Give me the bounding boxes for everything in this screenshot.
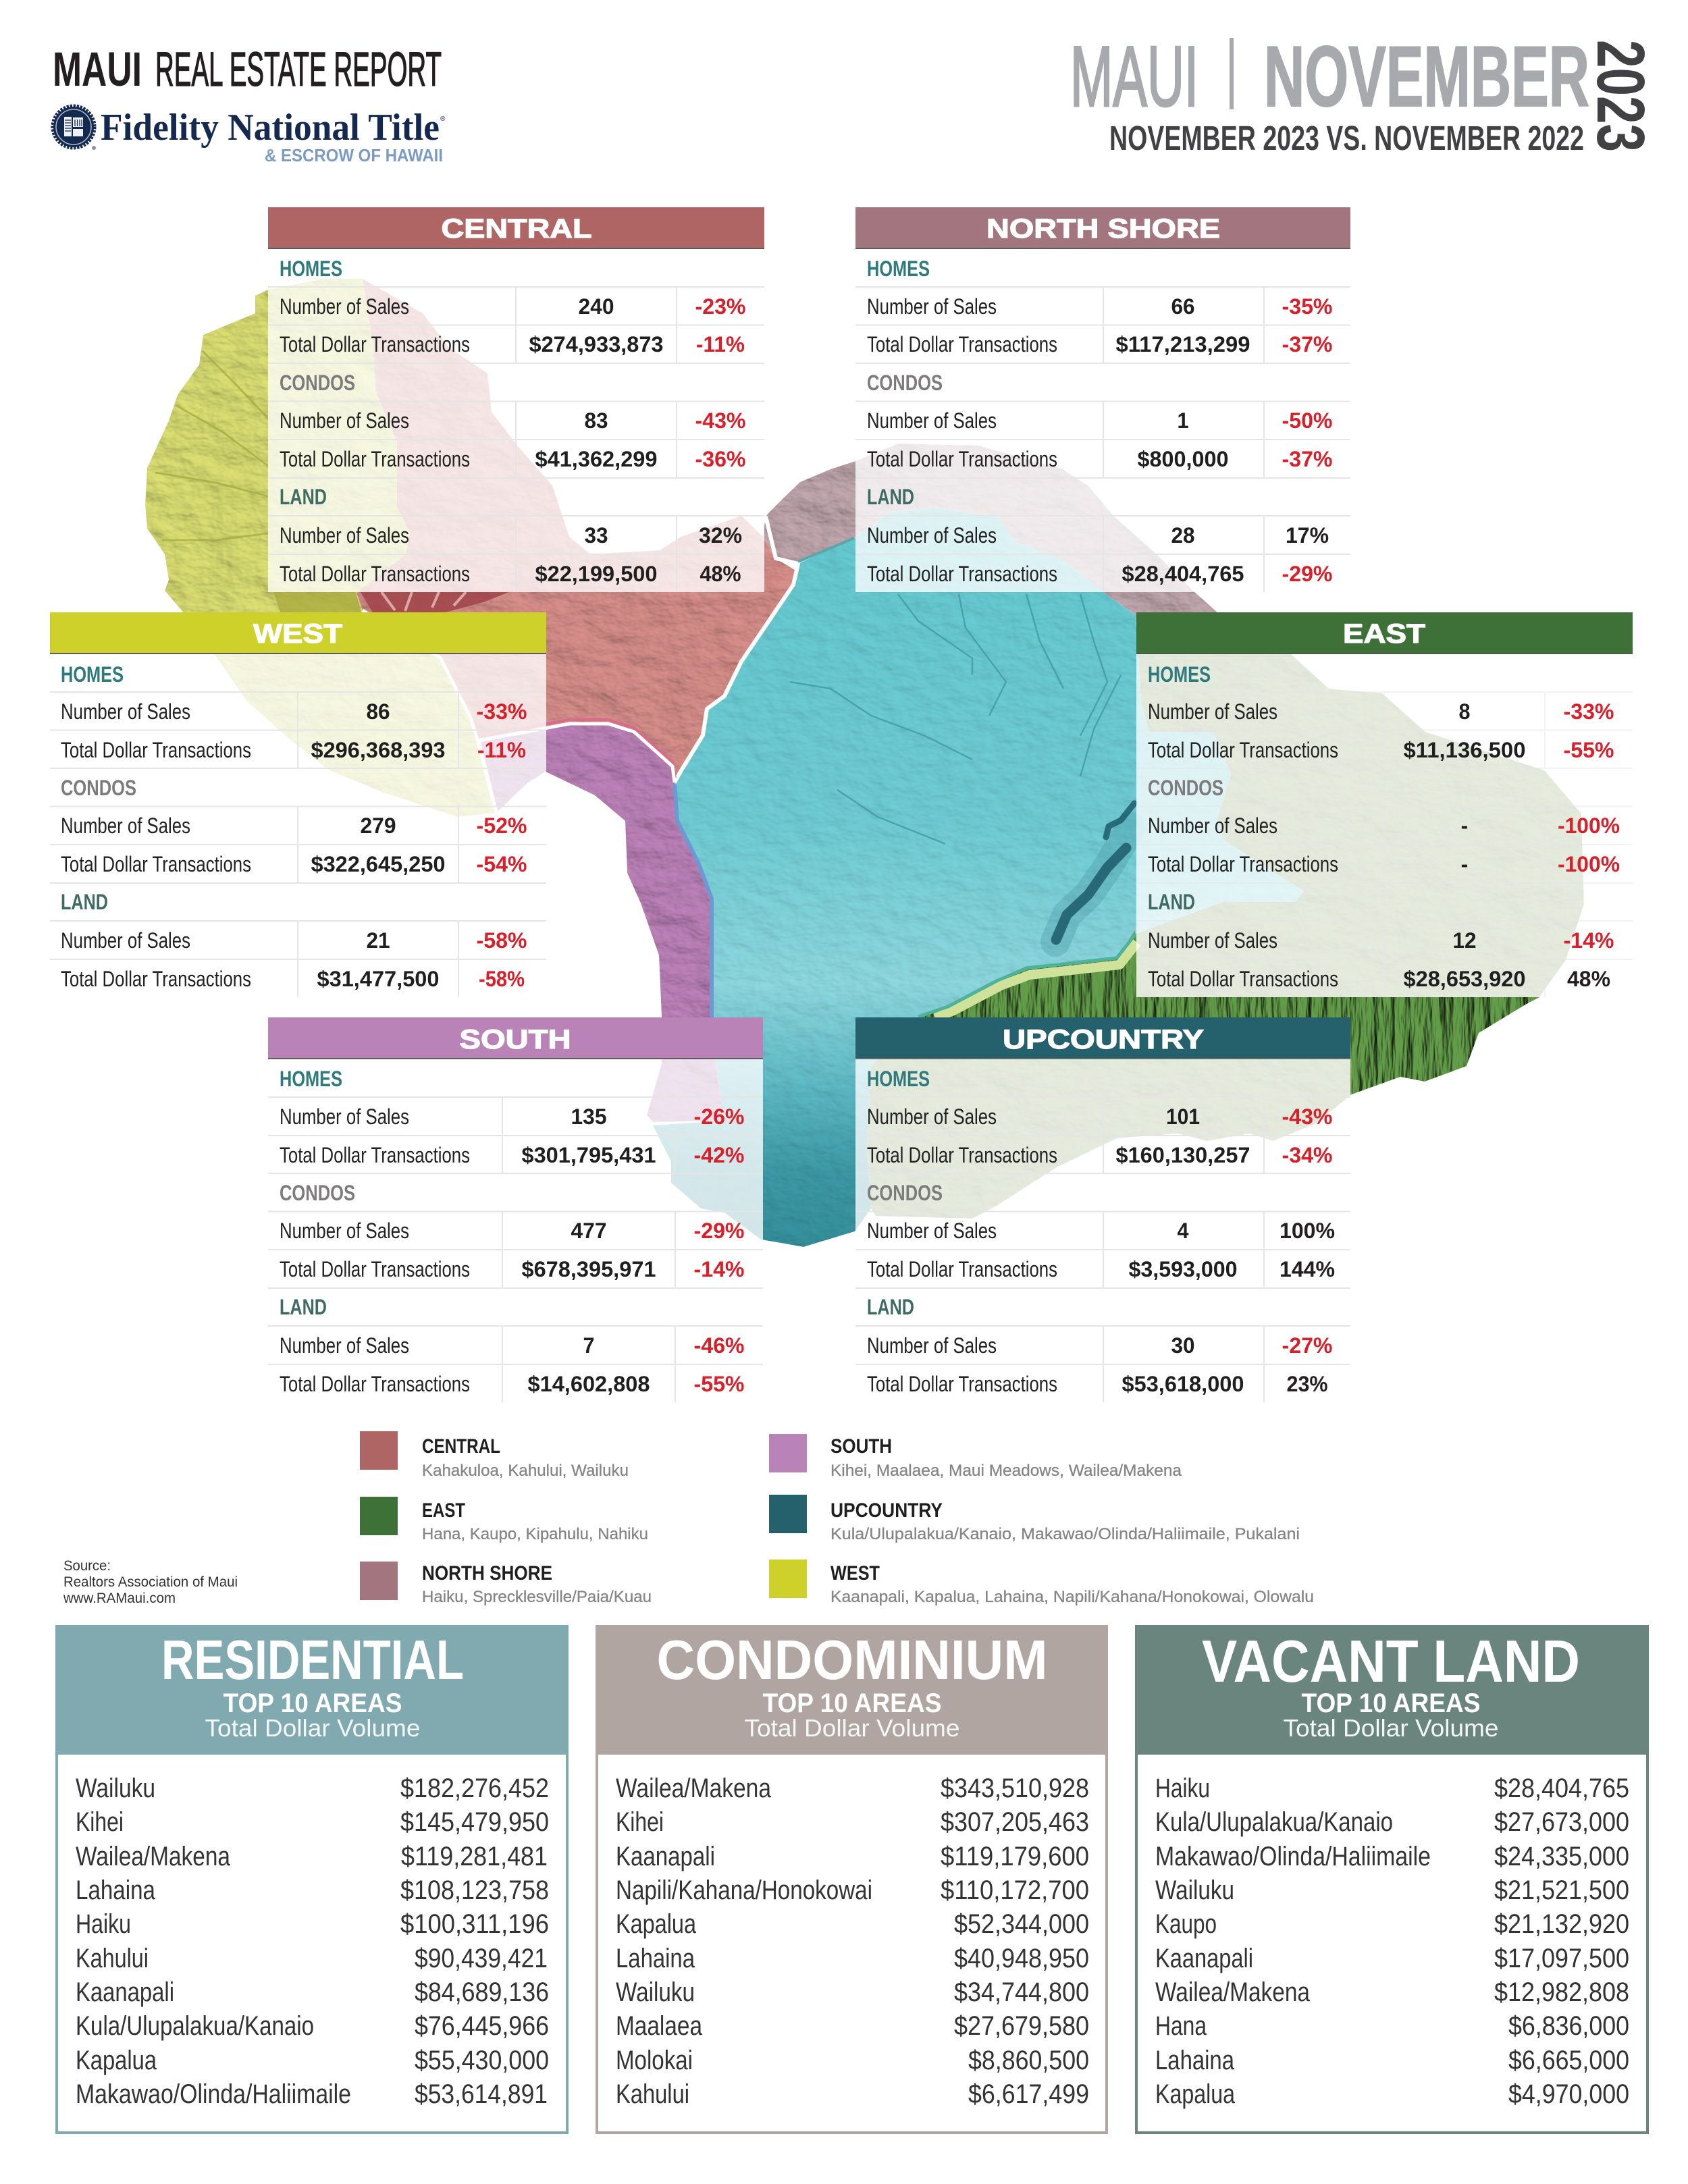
legend item: west [769,1560,1314,1606]
list: residential areas: $55,430,000 [415,2046,549,2075]
list: condominium areas: $6,617,499 [968,2079,1089,2109]
map detail: upcountry gullies [790,594,1121,844]
legend item: upcountry [769,1495,1300,1543]
condos rows: -43% [695,408,745,433]
land rows: -27% [1282,1333,1333,1358]
land rows: $28,653,920 [1403,967,1526,991]
list: vacant land areas: $28,404,765 [1494,1774,1629,1803]
land rows: -29% [1282,562,1333,586]
list: vacant land areas: $21,132,920 [1494,1909,1629,1939]
homes rows: -42% [694,1143,744,1167]
list: vacant land areas: Kula/Ulupalakua/Kanaio [1155,1807,1393,1837]
condos rows: 477 [571,1219,606,1243]
condos rows: Total Dollar Transactions [61,852,251,876]
list: vacant land areas: $4,970,000 [1508,2079,1629,2109]
box header: condominium: Total Dollar Volume [744,1714,960,1742]
box header: residential: TOP 10 AREAS [223,1688,402,1718]
list: residential areas: $182,276,452 [400,1774,549,1803]
condos rows: 83 [585,408,608,433]
map detail: west ridges [155,351,268,540]
land rows: Total Dollar Transactions [1148,967,1338,991]
homes rows: -11% [477,738,526,762]
heading: Maui November 2023: MAUI [1070,28,1198,124]
list: vacant land areas: $24,335,000 [1494,1842,1629,1871]
homes rows: HOMES [280,1067,342,1091]
condos rows: CONDOS [280,371,355,395]
land rows: LAND [61,890,108,914]
list: vacant land areas: Wailuku [1155,1875,1234,1905]
homes rows: 101 [1166,1104,1200,1129]
list: condominium areas: Kahului [616,2079,689,2109]
land rows: LAND [867,485,914,509]
condos rows: Total Dollar Transactions [867,1257,1057,1281]
box header: residential: Total Dollar Volume [205,1714,420,1742]
land rows: Number of Sales [280,523,409,548]
panel header: upcountry: UPCOUNTRY [1003,1025,1204,1055]
list: condominium areas: $40,948,950 [954,1944,1089,1973]
source note [63,1558,238,1606]
land rows: 7 [583,1333,594,1358]
condos rows: -14% [694,1257,744,1281]
box header: vacant land: Total Dollar Volume [1283,1714,1499,1742]
list: vacant land areas: Wailea/Makena [1155,1977,1311,2007]
homes rows: Total Dollar Transactions [1148,738,1338,762]
condos rows [61,776,527,876]
land rows: LAND [867,1295,914,1319]
condos rows [280,371,745,471]
homes rows: HOMES [867,257,930,281]
condos rows: CONDOS [1148,776,1223,800]
box header: residential: RESIDENTIAL [161,1628,464,1691]
list: residential areas: $90,439,421 [415,1944,548,1973]
legend item: east: Hana, Kaupo, Kipahulu, Nahiku [422,1525,648,1543]
list: vacant land areas: Hana [1155,2011,1207,2041]
condos rows: - [1461,814,1468,838]
list: vacant land areas: $6,665,000 [1508,2046,1629,2075]
list: condominium areas: $307,205,463 [941,1807,1089,1837]
homes rows: Total Dollar Transactions [867,1143,1057,1167]
homes rows: -34% [1282,1143,1333,1167]
condos rows: $41,362,299 [535,447,658,471]
homes rows: Number of Sales [280,1104,409,1129]
report title [53,43,442,97]
panel: vacant land top 10 [1135,1625,1649,2133]
legend item: central [360,1431,629,1480]
homes rows: -33% [477,699,527,724]
homes rows: Number of Sales [867,1104,997,1129]
land rows: LAND [280,1295,327,1319]
condos rows: $3,593,000 [1129,1257,1237,1281]
panel header: west: WEST [253,619,342,649]
logo: Fidelity National Title: Fidelity National Title [101,107,440,149]
legend item: south: Kihei, Maalaea, Maui Meadows, Wailea/Makena [830,1462,1182,1480]
list: condominium areas: Maalaea [616,2011,703,2041]
land rows: -58% [477,928,527,953]
condos rows: -100% [1558,852,1620,876]
box header: vacant land [1135,1625,1649,1755]
panel header: east: EAST [1343,619,1425,649]
list: residential areas [76,1774,549,2109]
land rows: Number of Sales [867,1333,997,1358]
heading: Maui November 2023 [1070,28,1658,157]
homes rows: 8 [1458,699,1471,724]
homes rows: Number of Sales [280,294,409,319]
legend item: north shore [360,1562,652,1606]
condos rows [867,371,1333,471]
panel header: central: CENTRAL [442,214,591,244]
map detail: upcountry ravine [1055,803,1134,942]
legend item: central: Kahakuloa, Kahului, Wailuku [422,1462,629,1480]
homes rows: Total Dollar Transactions [61,738,251,762]
legend item: south: SOUTH [830,1435,892,1458]
source note: Realtors Association of Maui [63,1574,238,1590]
list: vacant land areas: $21,521,500 [1494,1875,1629,1905]
land rows: 48% [700,562,741,586]
homes rows: -23% [695,294,745,319]
panel header: west [50,612,546,654]
list: condominium areas: $110,172,700 [941,1875,1089,1905]
list: residential areas: $145,479,950 [400,1807,549,1837]
land rows: LAND [1148,890,1195,914]
logo: Fidelity National Title [53,105,446,165]
land rows: LAND [280,485,327,509]
land rows: Total Dollar Transactions [61,967,251,991]
homes rows [280,1067,744,1167]
homes rows: $301,795,431 [521,1143,656,1167]
homes rows: $160,130,257 [1115,1143,1250,1167]
condos rows: CONDOS [867,371,943,395]
list: vacant land areas: $27,673,000 [1494,1807,1629,1837]
list: vacant land areas: Kaanapali [1155,1944,1253,1973]
condos rows: Total Dollar Transactions [280,447,470,471]
land rows: 30 [1171,1333,1195,1358]
land rows: Number of Sales [61,928,190,953]
condos rows: -52% [477,814,527,838]
land rows [867,485,1333,586]
land rows: 48% [1567,967,1610,991]
legend item: central: CENTRAL [422,1435,500,1458]
panel: upcountry [855,1017,1350,1402]
homes rows: -55% [1564,738,1614,762]
land rows [280,1295,744,1396]
condos rows: 279 [361,814,396,838]
land rows: $14,602,808 [528,1372,650,1396]
list: condominium areas: Kihei [616,1807,664,1837]
list: residential areas: Kaanapali [76,1977,174,2007]
condos rows: Total Dollar Transactions [1148,852,1338,876]
land rows [867,1295,1333,1396]
condos rows: $800,000 [1137,447,1229,471]
condos rows: Number of Sales [867,1219,997,1243]
report title: REAL ESTATE REPORT [155,43,442,97]
map region: central [357,279,797,782]
list: condominium areas: $343,510,928 [941,1774,1089,1803]
list: vacant land areas: Kaupo [1155,1909,1217,1939]
homes rows: $117,213,299 [1115,332,1250,356]
list: condominium areas: Kapalua [616,1909,697,1939]
condos rows: - [1461,852,1468,876]
list: residential areas: Haiku [76,1909,131,1939]
homes rows: $296,368,393 [311,738,446,762]
source note: www.RAMaui.com [63,1591,176,1606]
list: condominium areas: Molokai [616,2046,693,2075]
source note: Source: [63,1558,111,1574]
panel: east [1136,612,1633,997]
list: residential areas: Makawao/Olinda/Haliimaile [76,2079,351,2109]
homes rows: -37% [1282,332,1333,356]
condos rows [280,1181,744,1281]
logo: Fidelity National Title: ® [440,115,446,123]
condos rows: -29% [694,1219,744,1243]
map region: east [867,613,1584,1219]
condos rows: Total Dollar Transactions [280,1257,470,1281]
panel header: east [1136,612,1633,654]
land rows: Number of Sales [1148,928,1277,953]
list: residential areas: Kula/Ulupalakua/Kanaio [76,2011,314,2041]
list: vacant land areas: Makawao/Olinda/Haliimaile [1155,1842,1431,1871]
list: vacant land areas: Lahaina [1155,2046,1235,2075]
land rows: Total Dollar Transactions [280,562,470,586]
map region: upcountry [653,508,1304,1247]
land rows: -55% [694,1372,744,1396]
land rows [61,890,527,991]
legend item: upcountry: Kula/Ulupalakua/Kanaio, Makawao/Olinda/Haliimaile, Pukalani [830,1525,1300,1543]
homes rows: Total Dollar Transactions [280,332,470,356]
homes rows: HOMES [280,257,342,281]
condos rows: Number of Sales [867,408,997,433]
map of Maui regions [145,279,1584,1247]
condos rows [1148,776,1620,876]
list: condominium areas: Lahaina [616,1944,695,1973]
condos rows: Number of Sales [1148,814,1277,838]
condos rows: -50% [1282,408,1333,433]
condos rows: -37% [1282,447,1333,471]
list: vacant land areas: Haiku [1155,1774,1210,1803]
homes rows: Total Dollar Transactions [867,332,1057,356]
list: residential areas: Wailea/Makena [76,1842,231,1871]
land rows: 23% [1287,1372,1327,1396]
land rows: 21 [366,928,390,953]
homes rows: Number of Sales [1148,699,1277,724]
homes rows: -35% [1282,294,1333,319]
legend item: south [769,1434,1182,1480]
map region: west [145,279,496,817]
list: residential areas: $53,614,891 [415,2079,548,2109]
land rows [280,485,742,586]
legend item: north shore: Haiku, Sprecklesville/Paia/Kuau [422,1588,652,1606]
condos rows: -100% [1558,814,1620,838]
panel: west [50,612,546,997]
list: residential areas: Wailuku [76,1774,155,1803]
homes rows: 66 [1171,294,1195,319]
homes rows: Number of Sales [61,699,190,724]
homes rows [61,662,527,762]
homes rows: -11% [696,332,745,356]
legend item: west: Kaanapali, Kapalua, Lahaina, Napili/Kahana/Honokowai, Olowalu [830,1588,1314,1606]
map detail: mountain ridges [273,592,509,612]
land rows: $28,404,765 [1122,562,1244,586]
list: vacant land areas: $17,097,500 [1494,1944,1629,1973]
logo: Fidelity National Title: & ESCROW OF HAWAII [265,145,443,165]
condos rows: Number of Sales [61,814,190,838]
list: condominium areas: Kaanapali [616,1842,715,1871]
list: residential areas: Kahului [76,1944,149,1973]
land rows: 12 [1453,928,1476,953]
land rows: Number of Sales [280,1333,409,1358]
list: residential areas: $100,311,196 [400,1909,549,1939]
land rows: $22,199,500 [535,562,658,586]
box header: condominium [596,1625,1108,1755]
legend item: north shore: NORTH SHORE [422,1562,552,1584]
map detail: east rainforest [918,934,1539,1094]
list: vacant land areas: $12,982,808 [1494,1977,1629,2007]
homes rows: $11,136,500 [1403,738,1526,762]
panel header: central [268,207,764,249]
list: condominium areas: Napili/Kahana/Honokowai [616,1875,872,1905]
panel header: north shore [855,207,1350,249]
condos rows: CONDOS [280,1181,355,1205]
box header: vacant land: VACANT LAND [1202,1628,1580,1695]
homes rows: HOMES [1148,662,1211,687]
list: residential areas: $119,281,481 [401,1842,548,1871]
homes rows: -43% [1282,1104,1333,1129]
box header: residential [55,1625,569,1755]
land rows: -14% [1564,928,1614,953]
condos rows: $322,645,250 [311,852,446,876]
homes rows [1148,662,1614,762]
list: condominium areas [616,1774,1089,2109]
list: residential areas: $108,123,758 [400,1875,549,1905]
panel header: north shore: NORTH SHORE [986,214,1220,244]
legend item: upcountry: UPCOUNTRY [830,1499,943,1522]
list: residential areas: Kapalua [76,2046,157,2075]
list: condominium areas: $8,860,500 [968,2046,1089,2075]
map region: north shore [763,444,1218,615]
homes rows [867,257,1333,356]
list: vacant land areas: $6,836,000 [1508,2011,1629,2041]
condos rows: 1 [1178,408,1188,433]
condos rows: -54% [477,852,527,876]
land rows: 17% [1286,523,1329,548]
legend item: west: WEST [830,1562,880,1584]
heading: Maui November 2023: 2023 [1583,40,1658,152]
legend item: east: EAST [422,1499,465,1522]
panel: central [268,207,764,592]
list: condominium areas: $119,179,600 [941,1842,1089,1871]
homes rows: HOMES [61,662,124,687]
report title: MAUI [53,43,142,97]
land rows: -46% [694,1333,744,1358]
map region: south [479,722,722,1122]
homes rows: 86 [366,699,390,724]
condos rows: CONDOS [61,776,136,800]
list: condominium areas: $52,344,000 [954,1909,1089,1939]
legend [360,1431,1314,1606]
condos rows: CONDOS [867,1181,943,1205]
list: residential areas: $76,445,966 [415,2011,549,2041]
condos rows: 4 [1178,1219,1189,1243]
homes rows: -26% [694,1104,744,1129]
homes rows: -33% [1564,699,1614,724]
panel: residential top 10 [55,1625,569,2133]
icon: seal [53,105,96,150]
panel: condominium top 10 [596,1625,1108,2133]
list: condominium areas: $27,679,580 [954,2011,1089,2041]
condos rows: Number of Sales [280,408,409,433]
land rows: $53,618,000 [1122,1372,1244,1396]
list: residential areas: Kihei [76,1807,124,1837]
condos rows: 144% [1280,1257,1335,1281]
panel header: south [268,1017,763,1059]
list: vacant land areas: Kapalua [1155,2079,1236,2109]
list: condominium areas: Wailuku [616,1977,695,2007]
homes rows: Number of Sales [867,294,997,319]
list: condominium areas: Wailea/Makena [616,1774,772,1803]
condos rows: -36% [695,447,745,471]
panel: north shore [855,207,1350,592]
condos rows: Total Dollar Transactions [867,447,1057,471]
box header: vacant land: TOP 10 AREAS [1302,1688,1480,1718]
list: condominium areas: $34,744,800 [954,1977,1089,2007]
land rows [1148,890,1614,991]
homes rows: $274,933,873 [529,332,663,356]
box header: condominium: CONDOMINIUM [656,1628,1048,1691]
panel header: upcountry [855,1017,1350,1059]
land rows: Total Dollar Transactions [867,1372,1057,1396]
land rows: $31,477,500 [317,967,439,991]
land rows: 33 [585,523,608,548]
homes rows: 240 [578,294,614,319]
condos rows: Number of Sales [280,1219,409,1243]
map boundaries [363,516,1137,1018]
list: residential areas: Lahaina [76,1875,156,1905]
land rows: Total Dollar Transactions [867,562,1057,586]
condos rows: $678,395,971 [521,1257,656,1281]
land rows: Total Dollar Transactions [280,1372,470,1396]
condos rows: 100% [1280,1219,1335,1243]
list: vacant land areas [1155,1774,1629,2109]
list: residential areas: $84,689,136 [415,1977,549,2007]
panel: south [268,1017,763,1402]
homes rows [280,257,745,356]
homes rows: Total Dollar Transactions [280,1143,470,1167]
condos rows [867,1181,1335,1281]
panel header: south: SOUTH [459,1025,571,1055]
box header: condominium: TOP 10 AREAS [763,1688,941,1718]
land rows: -58% [479,967,525,991]
legend item: east [360,1497,648,1543]
homes rows: HOMES [867,1067,930,1091]
land rows: Number of Sales [867,523,997,548]
land rows: 32% [699,523,742,548]
land rows: 28 [1171,523,1195,548]
homes rows: 135 [571,1104,606,1129]
homes rows [867,1067,1333,1167]
